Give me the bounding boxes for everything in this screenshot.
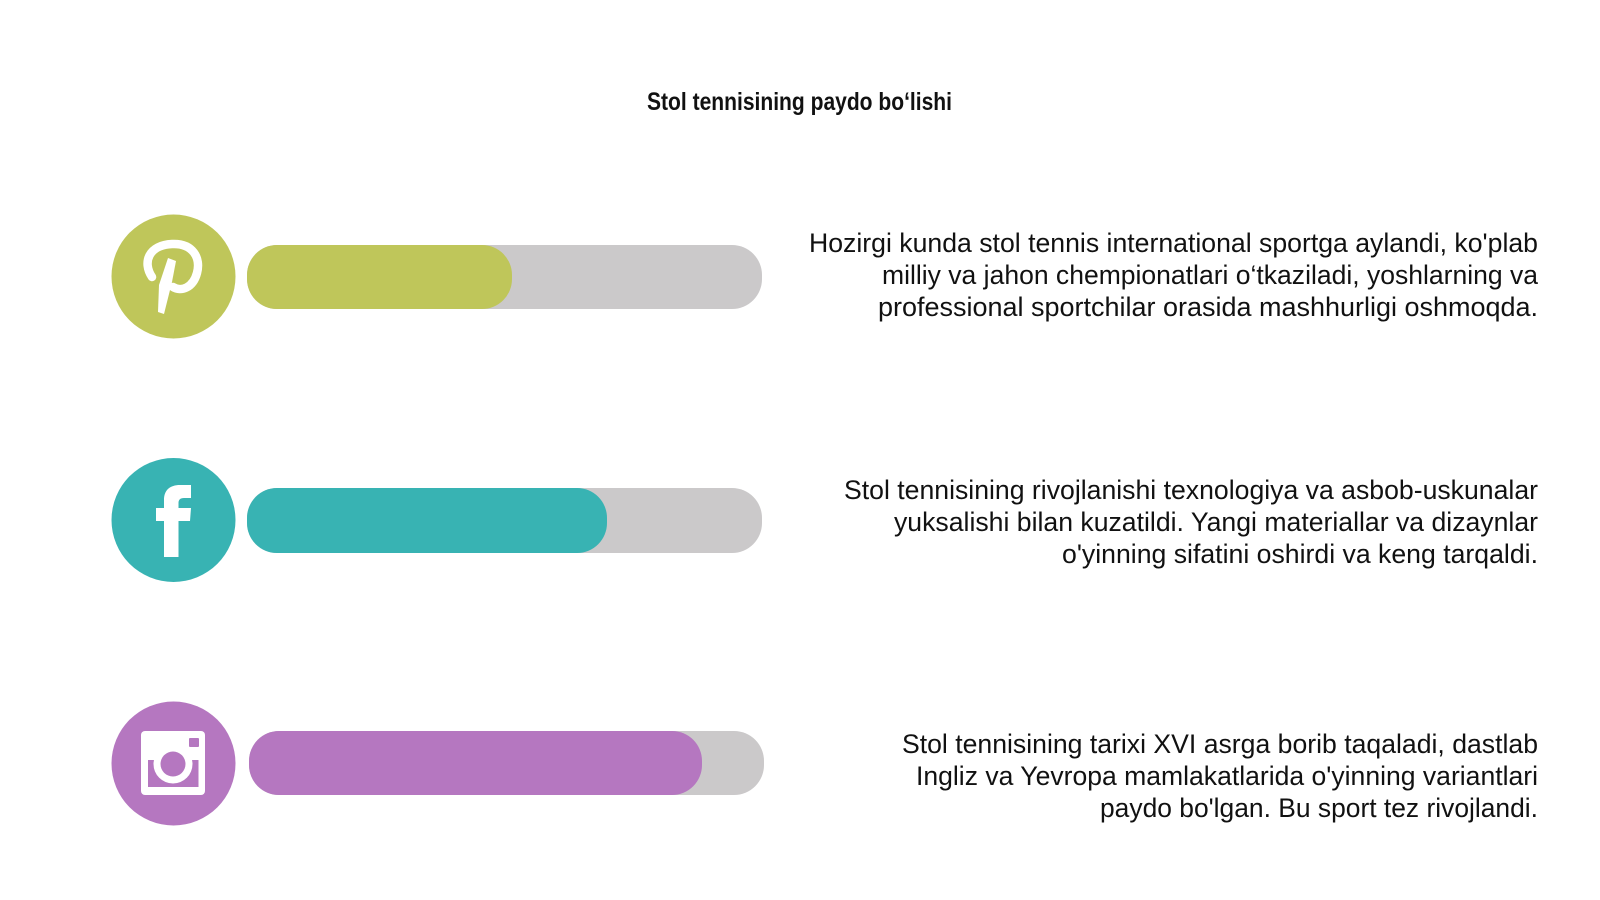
panel: row 1 pinterest [112, 214, 1539, 338]
panel: row 2 facebook [112, 458, 1538, 582]
text block 1: milliy va jahon chempionatlari o‘tkaziladi, yoshlarning va [882, 260, 1539, 290]
text block 3 [902, 729, 1538, 823]
text block 2: o'yinning sifatini oshirdi va keng tarqaldi. [1062, 539, 1538, 569]
text block 3: paydo bo'lgan. Bu sport tez rivojlandi. [1100, 793, 1538, 823]
text block 2: yuksalishi bilan kuzatildi. Yangi materiallar va dizaynlar [894, 507, 1538, 537]
text block 2: Stol tennisining rivojlanishi texnologiya va asbob-uskunalar [844, 475, 1538, 505]
text block 1: Hozirgi kunda stol tennis international sportga aylandi, ko'plab [809, 228, 1538, 258]
icon: facebook [112, 458, 236, 582]
icon: instagram [112, 702, 236, 826]
progress bar: purple [249, 731, 764, 795]
panel: row 3 instagram [112, 702, 1538, 826]
text block 2 [844, 475, 1538, 569]
text block 1 [809, 228, 1539, 322]
text block 3: Ingliz va Yevropa mamlakatlarida o'yinning variantlari [916, 761, 1538, 791]
icon: pinterest [112, 214, 236, 338]
text block 3: Stol tennisining tarixi XVI asrga borib taqaladi, dastlab [902, 729, 1538, 759]
progress bar: teal [247, 488, 762, 553]
progress bar: green [247, 245, 762, 309]
text block 1: professional sportchilar orasida mashhurligi oshmoqda. [878, 292, 1538, 322]
title: Stol tennisining paydo bo‘lishi [647, 88, 952, 116]
